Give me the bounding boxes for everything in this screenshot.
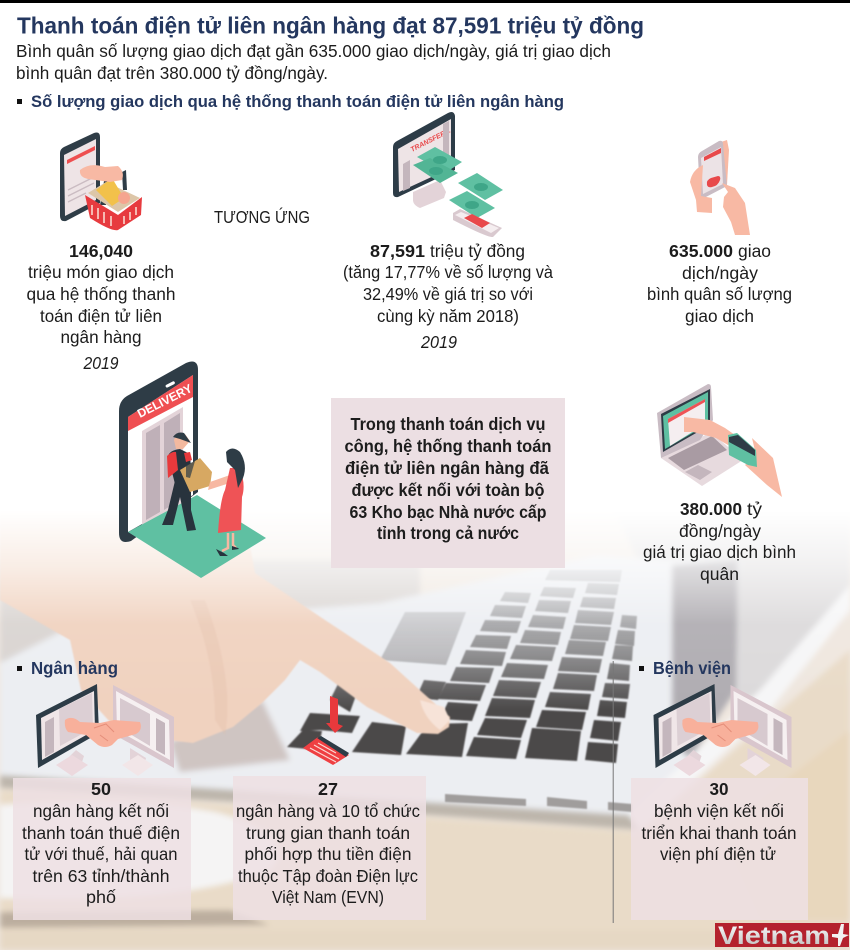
- stat: 380.000: đồng/ngày: [679, 521, 761, 541]
- icon: laptop with card: [657, 384, 782, 497]
- panel: 50 banks: ngân hàng kết nối: [33, 801, 169, 821]
- divider line: [613, 661, 614, 923]
- icon: handshake monitors, hospitals: [654, 684, 792, 776]
- intro text: bình quân đạt trên 380.000 tỷ đồng/ngày.: [16, 63, 328, 83]
- icon: red arrow and card: [303, 696, 349, 765]
- stat: 146,040: 146,040: [69, 241, 133, 261]
- stat: 380.000: quân: [700, 564, 739, 584]
- icon: delivery phone: DELIVERY: [135, 381, 194, 421]
- panel: 50 banks: tử với thuế, hải quan: [24, 844, 178, 864]
- stat: 380.000: giá trị giao dịch bình: [643, 542, 796, 562]
- panel: 27 banks: trung gian thanh toán: [246, 823, 410, 843]
- hand pressing a key: [0, 546, 451, 744]
- stat: 146,040: toán điện tử liên: [40, 306, 162, 326]
- icon: tablet with shopping basket: [60, 132, 142, 230]
- stat: 380.000: 380.000: [680, 499, 742, 519]
- stat: 146,040: ngân hàng: [60, 327, 142, 347]
- stat: 635.000: giao dịch: [685, 306, 754, 326]
- panel: public service callout: công, hệ thống thanh toán: [344, 436, 552, 456]
- icon: monitor with banknotes: TRANSFER...: [410, 128, 452, 154]
- panel: public service callout: tỉnh trong cả nước: [377, 523, 519, 543]
- logo: Vietnam+: Vietnam: [718, 922, 830, 950]
- panel: 50 banks: phố: [86, 887, 116, 907]
- section heading: transaction count: Số lượng giao dịch qua hệ thống thanh toán điện tử liên ngân hàng: [31, 92, 564, 111]
- panel: public service callout: được kết nối với toàn bộ: [352, 480, 544, 500]
- icon: hand tapping phone: [690, 140, 750, 235]
- stat: 380.000: [643, 499, 796, 584]
- panel: 50 banks: thanh toán thuế điện: [22, 823, 180, 843]
- label: tương ứng: TƯƠNG ỨNG: [214, 206, 310, 227]
- stat: 146,040: triệu món giao dịch: [28, 262, 174, 282]
- stat: 146,040: 2019: [83, 353, 119, 373]
- panel: public service callout: 63 Kho bạc Nhà nước cấp: [350, 502, 546, 522]
- stat: 380.000: tỷ: [747, 499, 762, 519]
- stat: 635.000: [647, 241, 792, 326]
- stat: 146,040: [26, 241, 176, 373]
- icon: handshake monitors, banks: [36, 684, 174, 776]
- panel: 27 banks: Việt Nam (EVN): [272, 887, 384, 907]
- laptop ports: [445, 794, 632, 812]
- stat: 87,591: 32,49% về giá trị so với: [363, 284, 533, 304]
- panel: 50 banks: 50: [91, 779, 111, 799]
- panel: 27 banks: phối hợp thu tiền điện: [244, 844, 412, 864]
- panel: 27 banks: [233, 776, 426, 920]
- panel: 30 hospitals: viện phí điện tử: [660, 844, 776, 864]
- panel: 27 banks: 27: [318, 779, 338, 799]
- stat: 87,591: triệu tỷ đồng: [430, 241, 525, 261]
- stat: 635.000: bình quân số lượng: [647, 284, 792, 304]
- stat: 87,591: (tăng 17,77% về số lượng và: [343, 262, 553, 282]
- stat: 146,040: qua hệ thống thanh: [26, 284, 176, 304]
- stat: 635.000: 635.000: [669, 241, 733, 261]
- stat: 87,591: [343, 241, 553, 352]
- panel: 27 banks: ngân hàng và 10 tổ chức: [236, 801, 420, 821]
- panel: public service callout: [331, 398, 565, 568]
- panel: 30 hospitals: 30: [710, 779, 729, 799]
- title: Thanh toán điện tử liên ngân hàng đạt 87,591 triệu tỷ đồng: [17, 12, 644, 38]
- panel: 30 hospitals: bệnh viện kết nối: [654, 801, 784, 821]
- panel: public service callout: điện tử liên ngân hàng đã: [345, 458, 549, 478]
- background photo: hand on laptop keyboard: [0, 528, 850, 950]
- stat: 635.000: dịch/ngày: [682, 263, 758, 283]
- icon: monitor with banknotes: [393, 112, 503, 237]
- keyboard keys: [287, 570, 637, 763]
- intro text: Bình quân số lượng giao dịch đạt gần 635.000 giao dịch/ngày, giá trị giao dịch: [16, 41, 611, 61]
- stat: 87,591: 2019: [420, 332, 457, 352]
- panel: 30 hospitals: triển khai thanh toán: [642, 823, 796, 843]
- stat: 87,591: 87,591: [370, 241, 425, 261]
- section heading: banks: Ngân hàng: [31, 658, 118, 678]
- icon: delivery phone: [119, 362, 266, 578]
- section heading: hospitals: Bệnh viện: [653, 658, 731, 678]
- panel: 30 hospitals: [631, 778, 808, 920]
- top black bar: [0, 0, 850, 3]
- intro text: [16, 41, 611, 83]
- panel: public service callout: Trong thanh toán dịch vụ: [350, 414, 546, 434]
- stat: 87,591: cùng kỳ năm 2018): [377, 306, 519, 326]
- stat: 635.000: giao: [738, 241, 771, 261]
- panel: 50 banks: [13, 778, 191, 920]
- panel: 27 banks: thuộc Tập đoàn Điện lực: [238, 866, 418, 886]
- panel: 50 banks: trên 63 tỉnh/thành: [32, 866, 170, 886]
